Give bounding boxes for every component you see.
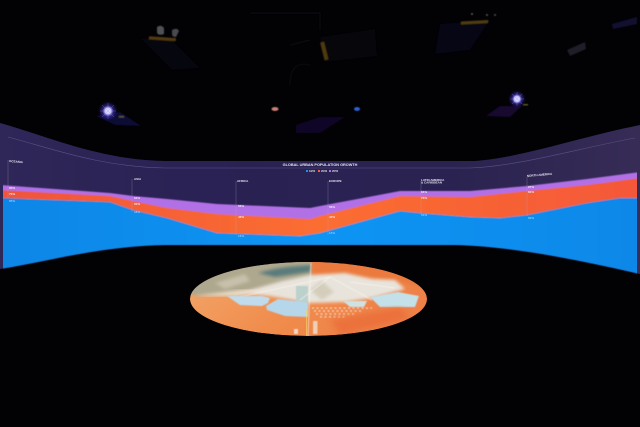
percentage values [9,185,534,238]
city built-up area [240,273,405,303]
region labels: EUROPE [329,179,342,183]
ceiling rig: projectors and lights [96,13,637,133]
region labels: LATIN AMERICA [421,178,445,182]
percentage values: 56% [329,205,335,209]
satellite terrain: north-west [190,262,312,298]
region labels: & CARIBBEAN [421,180,442,184]
dotted settlement pattern [312,308,372,317]
percentage values: 84% [421,190,427,194]
area: purple band [3,172,637,220]
area: orange band [0,178,640,240]
region marker lines [8,160,527,235]
satellite terrain: north-east orange [310,262,422,289]
panel: curved projection wall [0,123,640,274]
region labels: ASIA [134,177,142,181]
percentage values: 14% [329,231,335,235]
legend [306,169,339,173]
pale blue growth zones [227,292,419,317]
percentage values: 87% [528,185,534,189]
percentage values: 73% [421,196,427,200]
region labels: NORTH AMERICA [527,172,553,178]
percentage values: 43% [329,215,335,219]
percentage values: 56% [238,204,244,208]
percentage values: 51% [421,213,427,217]
percentage values: 14% [238,234,244,238]
percentage values: 50% [134,202,140,206]
urban grid roads [240,263,395,336]
legend: 2000 [321,169,328,173]
percentage values: 64% [528,216,534,220]
legend: 2050 [332,169,339,173]
percentage values: 64% [134,196,140,200]
exhibition room scene [0,12,640,336]
percentage values: 43% [238,215,244,219]
percentage values: 85% [9,186,15,190]
disc labels and marker [306,310,307,336]
map disc on the floor [190,262,427,336]
stacked area chart: urban population [0,172,640,274]
percentage values: 18% [134,210,140,214]
percentage values: 70% [9,192,15,196]
area: blue band [0,198,640,274]
deep orange patch [330,308,410,335]
wall background [0,123,640,274]
curved top rule [8,137,635,168]
chart title: GLOBAL URBAN POPULATION GROWTH [283,163,358,167]
region labels: AFRICA [237,179,249,183]
region labels [9,159,553,184]
percentage values: 81% [528,190,534,194]
region labels: OCEANIA [9,159,24,164]
percentage values: 65% [9,199,15,203]
legend: 1950 [309,169,316,173]
